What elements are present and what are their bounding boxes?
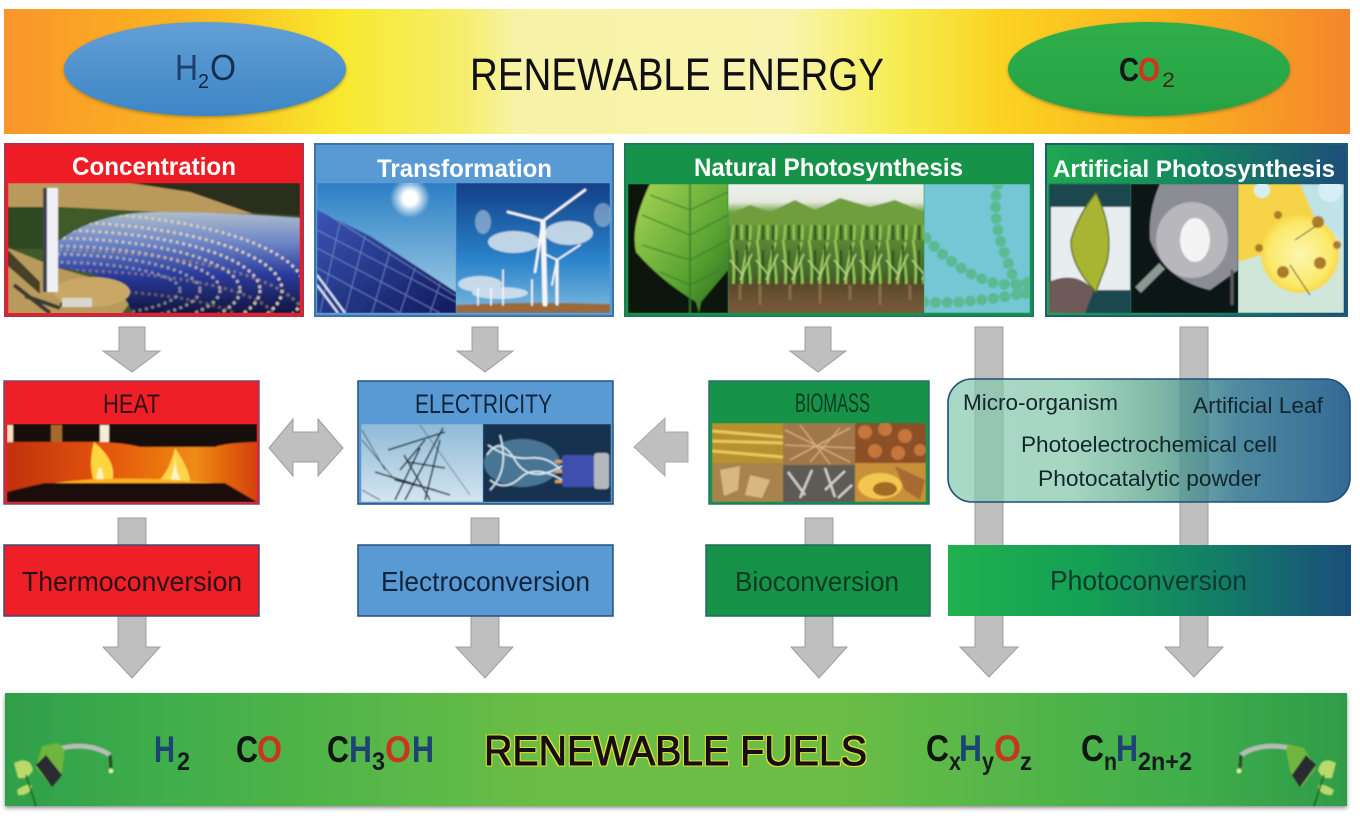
heading: concentration: Concentration <box>72 153 236 181</box>
ellipse: CO2: O <box>1138 51 1160 88</box>
box: thermoconversion <box>4 545 259 616</box>
connector: electricity to electroconversion <box>471 518 499 546</box>
photo: electric cable <box>483 424 611 502</box>
panel: electricity <box>358 381 613 504</box>
panel: transformation <box>315 144 613 316</box>
photo: artificial leaf <box>1049 184 1131 313</box>
arrow: natural photosynthesis to biomass <box>790 327 846 372</box>
box: photoconversion: Photoconversion <box>1050 565 1247 596</box>
photo: photoelectrochemical device <box>1131 184 1238 313</box>
formula: CO: O <box>257 729 282 770</box>
heading: heat: HEAT <box>103 389 160 419</box>
formula: CH3OH: O <box>385 729 411 770</box>
panel: heat <box>4 381 259 504</box>
formula: CxHyOz: y <box>982 748 994 776</box>
photo: cyanobacteria <box>924 184 1034 313</box>
panel: biomass <box>709 381 929 504</box>
formula: CxHyOz: x <box>949 748 961 776</box>
formula: CxHyOz: C <box>926 728 949 769</box>
formula: CH3OH: H <box>349 729 372 770</box>
heading: renewable fuels: RENEWABLE FUELS <box>484 727 867 774</box>
formula: CH3OH: C <box>327 729 349 770</box>
photo: solar panels <box>317 178 456 313</box>
ellipse: H2O: O <box>210 47 236 88</box>
formula: CnH2n+2: 2n+2 <box>1138 748 1192 776</box>
heading: biomass: BIOMASS <box>795 388 870 418</box>
photo: corn field <box>728 184 924 313</box>
banner: renewable fuels <box>5 693 1347 806</box>
photo: solar concentration field <box>8 183 300 313</box>
photo: wind turbines <box>456 183 612 313</box>
formula: CxHyOz: H <box>959 728 982 769</box>
ellipse: CO2 <box>1008 22 1290 116</box>
formula: CxHyOz: O <box>994 728 1021 769</box>
formula: CnH2n+2: H <box>1116 728 1138 769</box>
formula: CO <box>236 729 282 770</box>
panel: artificial photosynthesis <box>1046 144 1347 316</box>
formula: CnH2n+2 <box>1081 728 1192 776</box>
ellipse: H2O: 2 <box>198 71 209 93</box>
label: photoelectrochemical cell: Photoelectrochemical cell <box>1021 432 1277 457</box>
connector: biomass to bioconversion <box>805 518 833 546</box>
heading: renewable energy: RENEWABLE ENERGY <box>470 49 884 100</box>
arrow: transformation to electricity <box>457 327 513 372</box>
ellipse: CO2: 2 <box>1162 69 1175 92</box>
arrow: thermoconversion to fuels <box>103 616 160 678</box>
panel: natural photosynthesis <box>625 144 1034 316</box>
formula: H2: 2 <box>177 748 190 776</box>
arrow: biomass to electricity <box>634 418 688 476</box>
formula: CxHyOz: z <box>1020 748 1032 776</box>
photo: photocatalysis diagram <box>1238 178 1344 313</box>
panel: catalytic systems <box>948 379 1350 502</box>
box: electroconversion: Electroconversion <box>381 566 590 597</box>
heading: natural photosynthesis: Natural Photosynthesis <box>694 154 963 182</box>
photo: leaf <box>628 184 728 313</box>
formula: H2 <box>154 729 190 776</box>
icon: fuel nozzle left <box>14 743 114 806</box>
long arrow: artificial photosynthesis to fuels <box>1165 327 1223 677</box>
box: electroconversion <box>358 545 613 616</box>
label: micro-organism: Micro-organism <box>963 390 1118 415</box>
double arrow: heat and electricity <box>269 419 343 476</box>
arrow: bioconversion to fuels <box>791 616 847 678</box>
connector: heat to thermoconversion <box>118 518 146 546</box>
box: bioconversion <box>706 545 930 616</box>
panel: concentration <box>4 143 304 317</box>
formula: CxHyOz <box>926 728 1032 776</box>
formula: CH3OH <box>327 729 434 776</box>
arrow: concentration to heat <box>103 327 160 372</box>
box: photoconversion <box>948 545 1351 616</box>
photo: transmission tower <box>361 424 483 502</box>
heading: electricity: ELECTRICITY <box>415 389 552 419</box>
long arrow: natural photosynthesis to fuels <box>960 327 1018 677</box>
formula: CnH2n+2: n <box>1104 748 1117 776</box>
heading: transformation: Transformation <box>377 155 552 183</box>
box: thermoconversion: Thermoconversion <box>22 566 242 597</box>
label: photocatalytic powder: Photocatalytic powder <box>1038 466 1261 491</box>
formula: H2: H <box>154 729 175 770</box>
photo: flames <box>7 424 257 502</box>
formula: CH3OH: H <box>412 729 434 770</box>
banner: renewable energy <box>4 9 1350 134</box>
heading: artificial photosynthesis: Artificial Photosynthesis <box>1053 156 1335 183</box>
ellipse: H2O: H <box>175 47 198 88</box>
formula: CH3OH: 3 <box>372 748 385 776</box>
formula: CnH2n+2: C <box>1081 728 1104 769</box>
icon: fuel nozzle right <box>1236 744 1336 806</box>
label: artificial leaf: Artificial Leaf <box>1193 393 1324 418</box>
ellipse: CO2: C <box>1119 51 1139 88</box>
ellipse: H2O <box>64 22 346 116</box>
photo: biomass materials <box>712 422 926 502</box>
arrow: electroconversion to fuels <box>456 616 513 678</box>
formula: CO: C <box>236 729 258 770</box>
box: bioconversion: Bioconversion <box>735 566 899 597</box>
